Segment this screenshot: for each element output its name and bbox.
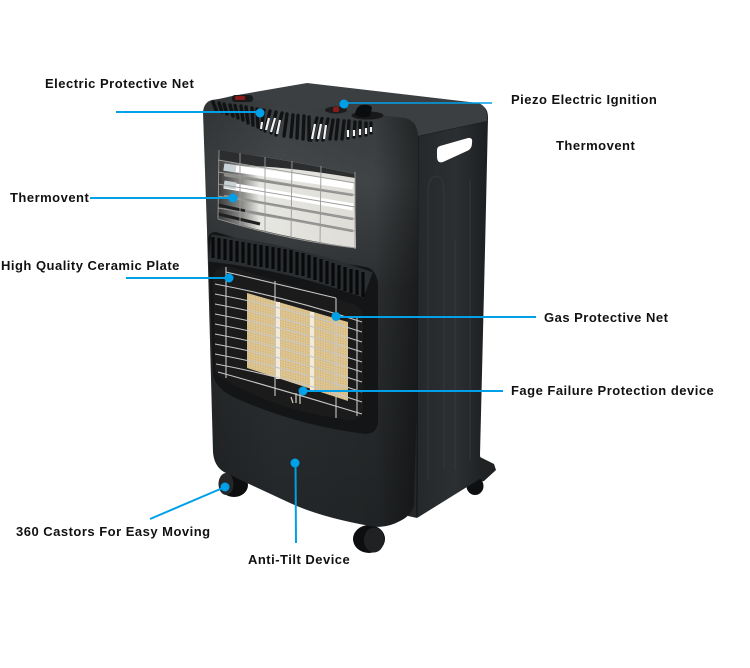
- electric heater window: [218, 150, 356, 249]
- gas protective grill: [215, 267, 362, 418]
- ceramic plate: [247, 293, 348, 401]
- flame failure device: [291, 393, 300, 404]
- carry handle: [437, 138, 472, 162]
- label: Thermovent right: Thermovent: [556, 138, 635, 153]
- front castor: [353, 525, 385, 553]
- heating tube bands: [224, 167, 353, 207]
- callout: High Quality Ceramic Plate: High Quality Ceramic Plate: [1, 258, 180, 273]
- gas panel vents: [210, 237, 368, 297]
- rear castor: [466, 477, 484, 495]
- gas window: [213, 266, 363, 420]
- callout: Fage Failure Protection device: [298, 383, 714, 398]
- callout: Fage Failure Protection device: Fage Failure Protection device: [511, 383, 714, 398]
- callout: Thermovent left: [10, 190, 238, 205]
- callout: Thermovent left: Thermovent: [10, 190, 89, 205]
- callout: Electric Protective Net: [45, 76, 264, 118]
- ignition button recess: [325, 106, 347, 114]
- callout: Piezo Electric Ignition: Piezo Electric Ignition: [511, 92, 657, 107]
- front body: [203, 97, 418, 527]
- callout: Anti-Tilt Device: Anti-Tilt Device: [248, 552, 350, 567]
- callout: Gas Protective Net: Gas Protective Net: [544, 310, 669, 325]
- left castor: [218, 473, 248, 497]
- rear tray foot: [474, 456, 496, 483]
- red ignition button: [333, 107, 339, 112]
- plate dividers: [278, 302, 312, 390]
- side panel seam: [418, 121, 487, 136]
- callout: Piezo Electric Ignition: [340, 92, 657, 108]
- control knob: [352, 105, 384, 120]
- callout: Gas Protective Net: [332, 310, 669, 325]
- red rocker switch: [232, 95, 253, 102]
- gas panel frame: [208, 232, 378, 434]
- callout: 360 Castors For Easy Moving: [16, 482, 230, 539]
- top vents: [213, 102, 371, 140]
- window guard: [218, 150, 356, 249]
- top plane: [206, 83, 487, 136]
- callout: 360 Castors For Easy Moving: 360 Castors For Easy Moving: [16, 524, 211, 539]
- callout: Anti-Tilt Device: [248, 458, 350, 567]
- heater product: [203, 83, 496, 553]
- callout: High Quality Ceramic Plate: [1, 258, 234, 282]
- side panel: [408, 106, 488, 518]
- tube end caps: [224, 167, 236, 186]
- side ribs: [428, 176, 470, 480]
- dark upper shadow: [218, 150, 355, 178]
- callout: Electric Protective Net: Electric Protective Net: [45, 76, 194, 91]
